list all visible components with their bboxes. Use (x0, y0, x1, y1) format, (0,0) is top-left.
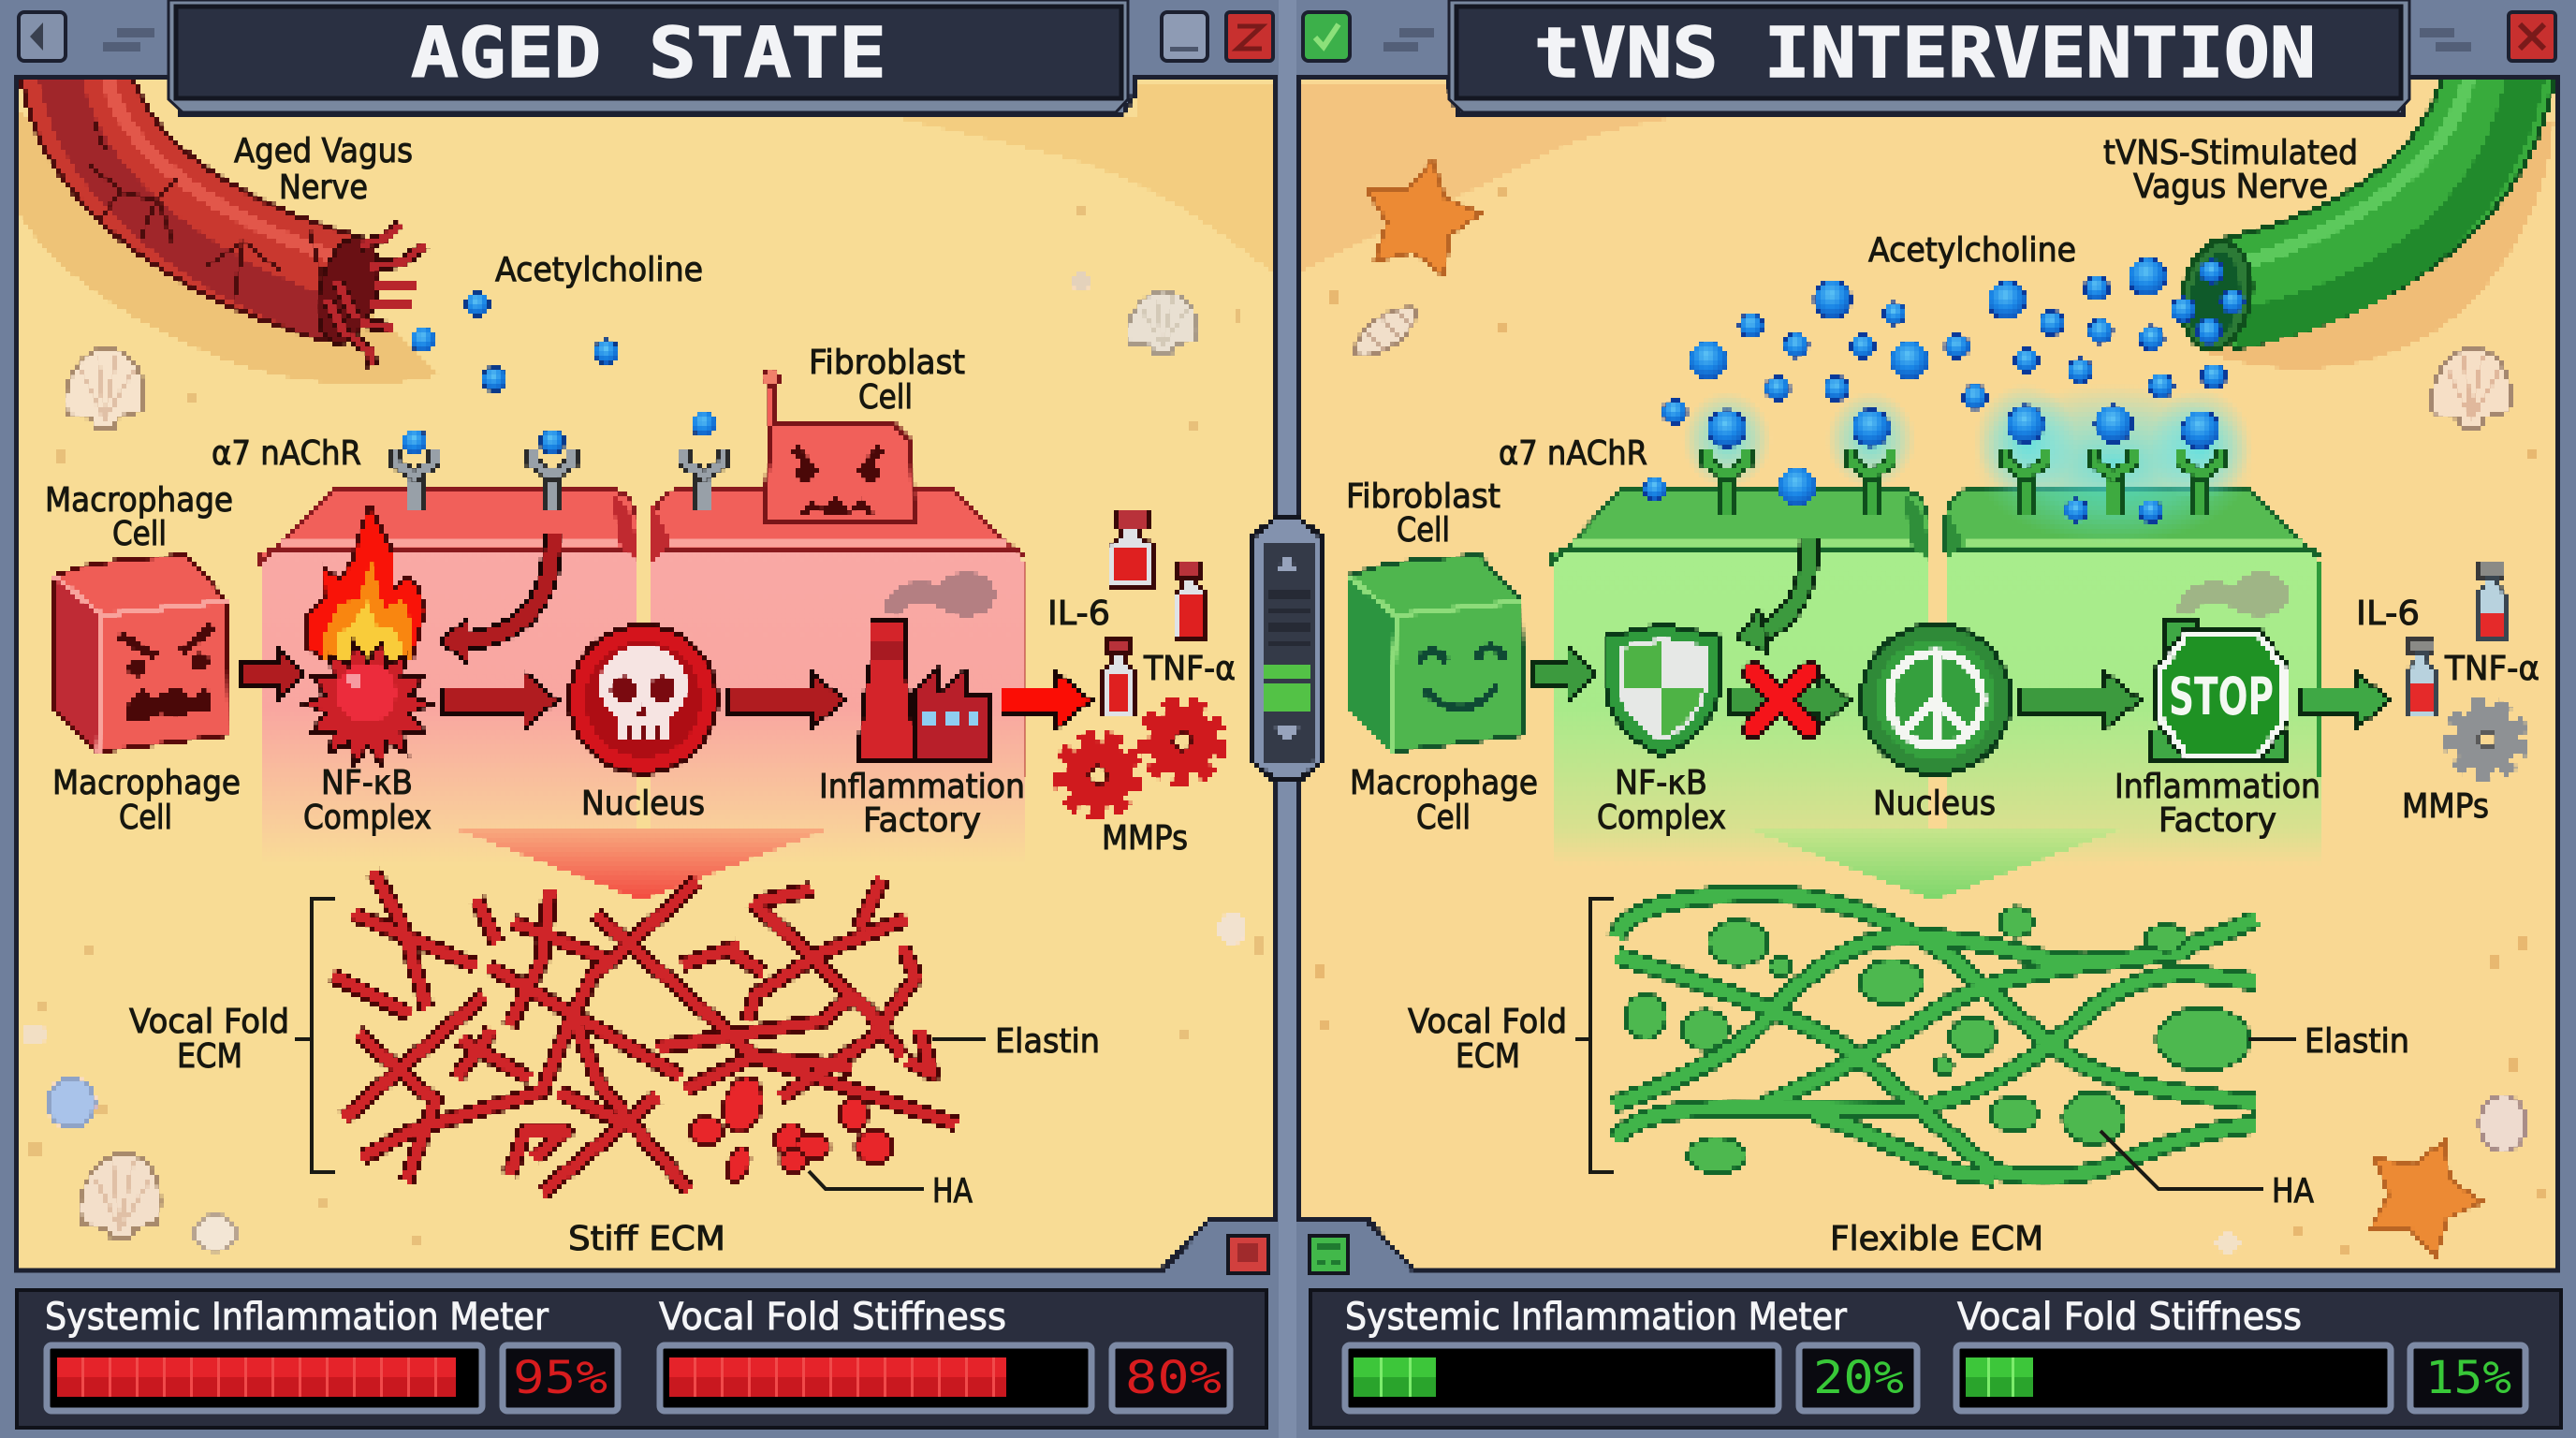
label: NF-kB complex (303, 764, 432, 837)
pebble (2216, 1233, 2240, 1254)
label: fibroblast cell (1346, 477, 1500, 550)
vial: low (2407, 638, 2437, 716)
fibroblast cell interior (652, 490, 1025, 866)
label: alpha7 nAChR: α7 nAChR (1499, 434, 1647, 473)
center divider (1279, 0, 1296, 1438)
macrophage cell interior (261, 490, 637, 866)
window button: back (19, 12, 66, 61)
value box: 80%: 80% (1125, 1352, 1222, 1404)
label: vocal fold ECM: ECM (1456, 1037, 1520, 1076)
stiffness bar 80% (660, 1345, 1091, 1411)
label: macrophage cell (1350, 764, 1538, 837)
green level bars (1266, 665, 1310, 712)
label: aged vagus nerve: Nerve (279, 169, 368, 207)
label: vocal fold ECM: Vocal Fold (129, 1003, 289, 1041)
sand dune shading (891, 82, 1273, 273)
window button: minimize (1162, 12, 1208, 61)
starfish (1353, 149, 1489, 281)
label: flexible ECM: Flexible ECM (1830, 1220, 2043, 1258)
rock shell (2480, 1095, 2526, 1152)
title text: AGED STATE (411, 13, 886, 94)
elastin leader (932, 1037, 986, 1041)
label: macrophage cell top: Macrophage (45, 481, 233, 520)
hyaluronic acid blobs (1625, 907, 2250, 1173)
blue rock (48, 1078, 95, 1127)
value box: 95%: 95% (513, 1352, 607, 1404)
smoke (2176, 572, 2290, 616)
value box: 20% (1799, 1345, 1917, 1411)
vial (1109, 510, 1152, 586)
label: inflammation factory (2115, 768, 2320, 840)
curved arrow: receptor to NF-kB (439, 532, 553, 663)
arrow: NF-kB to nucleus (443, 672, 558, 728)
sand dune shading (1303, 82, 1685, 271)
value box: 95% (503, 1345, 618, 1411)
ECM bracket (295, 899, 335, 1172)
pebble (22, 1023, 47, 1046)
label: fibroblast cell: Cell (858, 378, 913, 417)
curved arrow: receptor to shield (1737, 536, 1810, 653)
acetylcholine molecules: abundant (1644, 258, 2244, 522)
value box: 80% (1112, 1345, 1230, 1411)
arrow: macrophage to shield (1532, 648, 1595, 700)
face (794, 448, 882, 517)
label: NF-kB complex: Complex (1597, 799, 1726, 837)
label: MMPs: MMPs (2402, 787, 2489, 826)
scroll up arrow (1275, 554, 1299, 573)
label: fibroblast cell (809, 344, 965, 417)
status button: green (1310, 1236, 1348, 1273)
label: HA: HA (2272, 1172, 2314, 1211)
hyaluronic acid fragments (689, 1073, 893, 1184)
inflammation bar 95% (47, 1345, 482, 1411)
vial (1175, 562, 1205, 640)
nucleus: skull (569, 625, 717, 773)
shell (66, 348, 144, 429)
pebble (1072, 272, 1090, 291)
label: acetylcholine: Acetylcholine (1868, 231, 2076, 270)
label: NF-kB complex (1597, 764, 1726, 837)
stop octagon (2157, 629, 2289, 761)
macrophage cube: happy (1348, 555, 1524, 752)
label: nucleus: Nucleus (1873, 785, 1996, 823)
aged state artwork (17, 66, 1276, 1269)
smoke (883, 572, 996, 616)
tVNS-stimulated vagus nerve (2174, 66, 2527, 355)
shell (2432, 348, 2510, 429)
fibroblast cell (763, 370, 914, 521)
title text: tVNS INTERVENTION (1534, 13, 2316, 94)
center connector control (1251, 518, 1324, 781)
vial: low (2477, 562, 2507, 638)
alpha7 receptors: aged (395, 448, 724, 511)
happy face (1418, 647, 1505, 709)
nerve shadow (21, 112, 440, 384)
blocked arrow (1731, 672, 1850, 728)
value box: 15%: 15% (2425, 1352, 2511, 1404)
window button: close (2509, 12, 2555, 61)
window grip (103, 33, 154, 47)
elastin leader (2248, 1037, 2296, 1041)
shell (1128, 291, 1197, 354)
ECM bracket (1575, 899, 1614, 1172)
aged vagus nerve (58, 66, 425, 367)
gear: MMP (1145, 704, 1220, 779)
label: NF-kB complex: NF-κB (321, 764, 413, 802)
inflammation factory (857, 620, 991, 760)
dashboard: tVNS (1310, 1290, 2561, 1428)
gear: inactive MMP (2451, 704, 2522, 775)
sand speckles (28, 206, 1262, 1245)
label: inflammation factory: Inflammation (819, 768, 1025, 806)
label: fibroblast cell: Fibroblast (1346, 477, 1500, 516)
alpha7 receptors: active (1707, 448, 2220, 513)
title bar: aged state (168, 0, 1128, 112)
label: macrophage cell bottom: Cell (119, 799, 172, 837)
windows (923, 712, 980, 726)
macrophage cube: angry (54, 555, 229, 752)
label: tVNS-stimulated vagus nerve: Vagus Nerve (2133, 168, 2328, 206)
label: aged vagus nerve: Aged Vagus (234, 132, 413, 170)
label: HA: HA (932, 1172, 973, 1211)
label: acetylcholine: Acetylcholine (495, 251, 703, 289)
red X (1753, 672, 1809, 728)
window grip (2420, 33, 2471, 47)
STOP text: STOP (2169, 667, 2274, 726)
status button: red (1228, 1236, 1268, 1273)
window grip (1383, 33, 1434, 47)
membrane top (652, 490, 1025, 556)
inflammation bar 20% (1345, 1345, 1778, 1411)
label: nucleus: Nucleus (581, 785, 705, 823)
spiky complex (304, 642, 432, 766)
pebble (1218, 913, 1246, 945)
downward gradient arrow (1744, 828, 2127, 901)
acetylcholine molecules (402, 292, 716, 454)
sand background: aged state (17, 79, 1276, 1269)
label: tVNS-stimulated vagus nerve (2103, 134, 2358, 206)
cone shell (1345, 299, 1427, 365)
label: macrophage cell bottom (52, 764, 241, 837)
label: inflammation factory: Inflammation (2115, 768, 2320, 806)
label: fibroblast cell: Fibroblast (809, 344, 965, 382)
fibroblast cell interior (1945, 490, 2320, 866)
label: NF-kB complex: Complex (303, 799, 432, 837)
meter title: systemic inflammation: Systemic Inflammation Meter (45, 1296, 549, 1339)
label: TNF-alpha: TNF-α (1143, 650, 1236, 688)
green factory (2150, 620, 2286, 760)
label: macrophage cell top (45, 481, 233, 553)
label: vocal fold ECM (129, 1003, 289, 1076)
peace symbol (1889, 653, 1983, 746)
stiffness bar 15% (1956, 1345, 2391, 1411)
flame (305, 504, 426, 660)
label: IL-6: IL-6 (2356, 594, 2420, 633)
scroll down arrow (1275, 726, 1299, 744)
panel: aged state (17, 66, 1276, 1269)
sand speckles (1315, 187, 2546, 1253)
label: vocal fold ECM (1408, 1003, 1567, 1076)
label: macrophage cell bottom: Macrophage (52, 764, 241, 802)
label: MMPs: MMPs (1102, 819, 1188, 858)
membrane top (261, 490, 637, 562)
meter title: vocal fold stiffness: Vocal Fold Stiffness (1957, 1296, 2302, 1339)
tVNS artwork (1298, 66, 2556, 1269)
macrophage cell interior (1553, 490, 1928, 866)
arrow: factory to cytokines (2301, 672, 2391, 728)
arrow: factory to cytokines (1002, 672, 1091, 728)
meter title: vocal fold stiffness: Vocal Fold Stiffness (659, 1296, 1006, 1339)
label: aged vagus nerve (234, 132, 413, 207)
arrow: macrophage to NF-kB (241, 648, 303, 700)
flexible ECM mesh (1613, 894, 2257, 1178)
panel: tVNS intervention (1298, 66, 2556, 1269)
arrow: nucleus to factory (728, 672, 845, 728)
value box: 15% (2410, 1345, 2525, 1411)
dashboard: aged (17, 1290, 1266, 1428)
skull (599, 646, 687, 740)
frayed nerve end (318, 234, 379, 346)
antenna (766, 384, 777, 427)
label: vocal fold ECM: ECM (177, 1037, 242, 1076)
label: macrophage cell: Macrophage (1350, 764, 1538, 802)
vial (1104, 638, 1134, 716)
open nerve end (2181, 239, 2256, 351)
label: alpha7 nAChR: α7 nAChR (212, 434, 361, 473)
label: elastin: Elastin (995, 1022, 1100, 1061)
label: stiff ECM: Stiff ECM (568, 1220, 725, 1258)
label: inflammation factory: Factory (2159, 801, 2276, 840)
shell (80, 1153, 160, 1240)
downward gradient arrow (451, 828, 833, 901)
arrow: nucleus to stop (2021, 672, 2141, 728)
label: fibroblast cell: Cell (1397, 511, 1450, 550)
label: inflammation factory (819, 768, 1025, 840)
cracks (89, 122, 323, 300)
angry face (119, 625, 213, 723)
value box: 20%: 20% (1813, 1352, 1904, 1404)
gear: MMP (1061, 738, 1135, 813)
label: inflammation factory: Factory (863, 801, 981, 840)
nucleus: peace (1861, 624, 2011, 774)
membrane top (1945, 490, 2320, 556)
membrane top (1553, 490, 1928, 562)
window button: close (1226, 12, 1273, 61)
NF-kB complex on fire (304, 504, 432, 766)
label: IL-6: IL-6 (1047, 594, 1110, 633)
label: vocal fold ECM: Vocal Fold (1408, 1003, 1567, 1041)
nerve shadow (2200, 103, 2554, 369)
label: macrophage cell: Cell (1416, 799, 1471, 837)
HA leader (809, 1171, 924, 1189)
receptor glow (1682, 384, 2254, 543)
stiff ECM mesh (332, 872, 957, 1193)
label: TNF-alpha: TNF-α (2444, 650, 2539, 688)
HA leader (2100, 1131, 2263, 1189)
meter title: systemic inflammation: Systemic Inflammation Meter (1345, 1296, 1847, 1339)
title bar: tVNS (1449, 0, 2409, 112)
label: NF-kB complex: NF-κB (1615, 764, 1707, 802)
window button: check (1303, 12, 1350, 61)
starfish (2349, 1120, 2498, 1265)
label: macrophage cell top: Cell (112, 515, 167, 553)
NF-kB shield (1605, 624, 1720, 756)
sand background: tVNS (1298, 79, 2556, 1269)
label: tVNS-stimulated vagus nerve: tVNS-Stimulated (2103, 134, 2358, 172)
pebble (195, 1215, 236, 1251)
label: elastin: Elastin (2305, 1022, 2409, 1061)
